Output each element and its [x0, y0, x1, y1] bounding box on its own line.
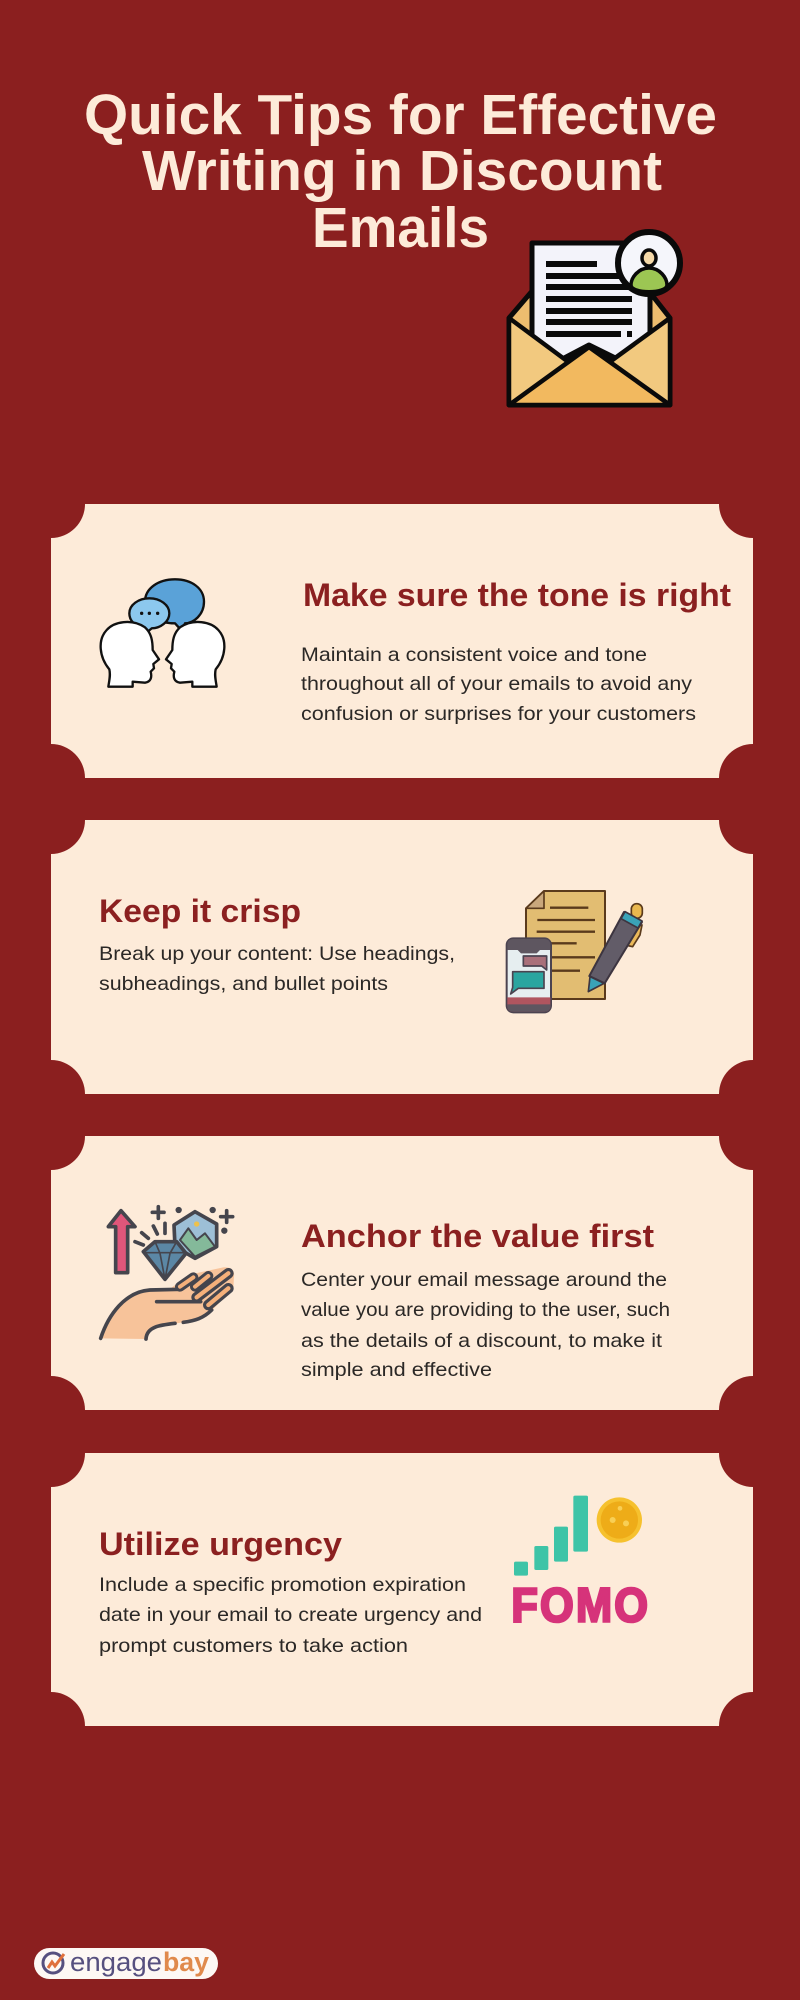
body text: confusion or surprises for your customers	[301, 703, 696, 725]
logo: engagebay	[34, 1947, 218, 1979]
panel: crisp	[51, 820, 753, 1094]
body text: simple and effective	[301, 1359, 492, 1381]
title: Writing in Discount	[142, 139, 662, 203]
logo: engagebay: bay	[163, 1947, 209, 1977]
card background	[51, 504, 753, 778]
icon: FOMO bars and coin	[511, 1496, 648, 1632]
body text	[99, 1574, 482, 1657]
icon: open envelope with letter and user avatar	[509, 232, 680, 405]
heading: Anchor the value first	[301, 1218, 654, 1254]
icon: hand, diamond, picture and arrow	[101, 1207, 234, 1339]
icon: two heads talking	[101, 579, 224, 687]
icon: FOMO bars and coin: FOMO	[511, 1577, 648, 1632]
title: Quick Tips for Effective	[84, 83, 717, 147]
title: Emails	[312, 196, 489, 260]
icon: document, phone and pen	[507, 891, 642, 1012]
body text	[301, 644, 696, 725]
body text: Include a specific promotion expiration	[99, 1574, 466, 1596]
logo: engagebay: engage	[70, 1947, 162, 1977]
body text: subheadings, and bullet points	[99, 973, 388, 995]
panel: urgency	[51, 1453, 753, 1726]
panel: tone	[51, 504, 753, 778]
heading: Make sure the tone is right	[303, 577, 731, 613]
body text: as the details of a discount, to make it	[301, 1330, 663, 1352]
card background	[51, 1453, 753, 1726]
body text: date in your email to create urgency and	[99, 1604, 482, 1626]
body text: Break up your content: Use headings,	[99, 943, 455, 965]
heading: Keep it crisp	[99, 893, 301, 929]
body text: value you are providing to the user, such	[301, 1299, 670, 1321]
panel: anchor value	[51, 1136, 753, 1410]
card background	[51, 1136, 753, 1410]
body text	[301, 1269, 670, 1381]
heading: Utilize urgency	[99, 1526, 342, 1562]
body text: Maintain a consistent voice and tone	[301, 644, 647, 666]
body text: prompt customers to take action	[99, 1635, 408, 1657]
body text: Center your email message around the	[301, 1269, 667, 1291]
body text	[99, 943, 455, 995]
title	[84, 83, 717, 260]
body text: throughout all of your emails to avoid any	[301, 673, 692, 695]
card background	[51, 820, 753, 1094]
